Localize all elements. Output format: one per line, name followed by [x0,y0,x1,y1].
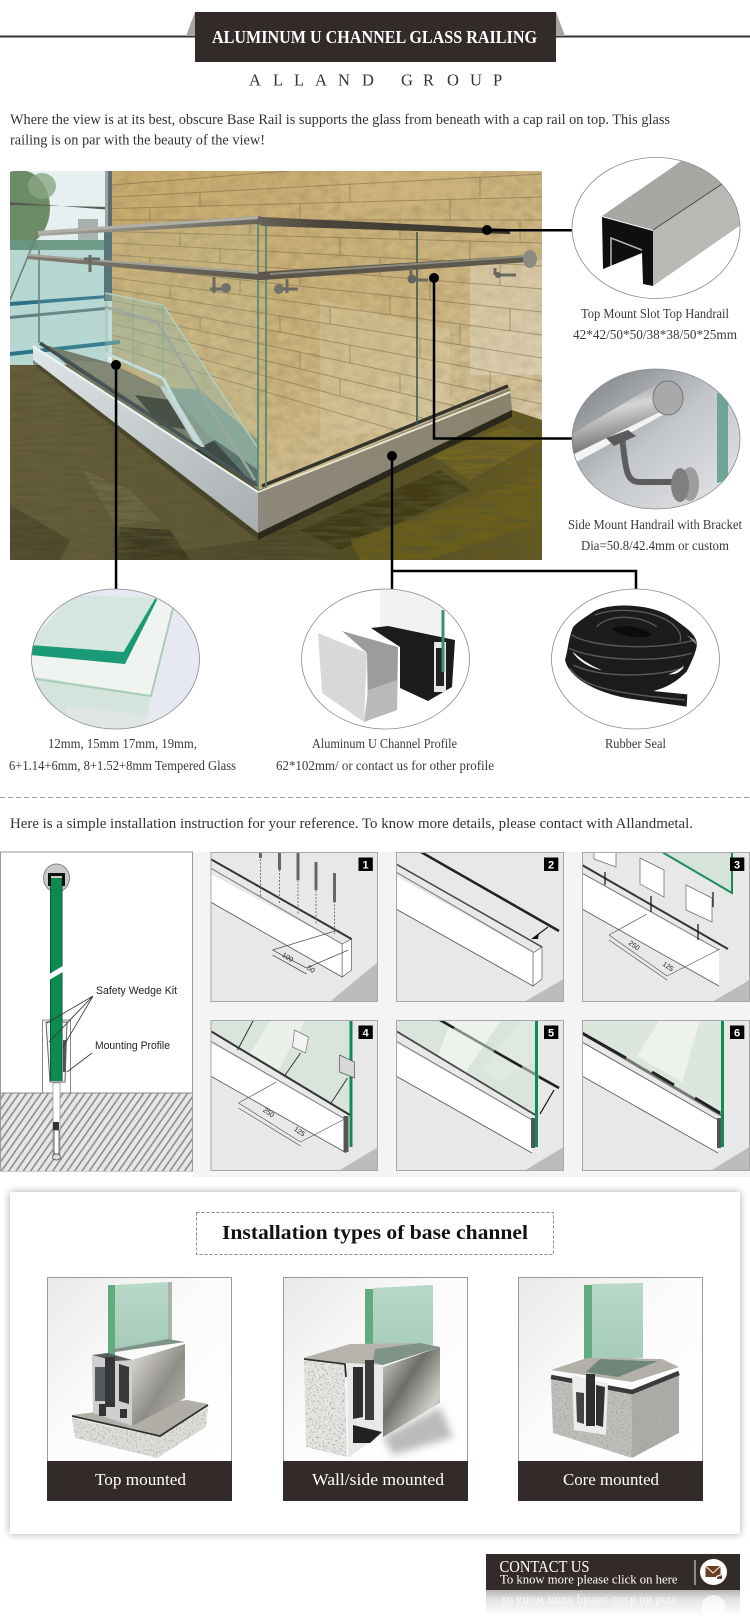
icon: envelope [700,1559,727,1585]
glass panels and posts [10,217,417,490]
caption: aluminum profile: Aluminum U Channel Profile [312,737,457,752]
step 1: 100 [280,952,294,964]
caption: tempered glass [9,737,236,774]
caption: rubber seal: Rubber Seal [605,737,666,752]
caption: tempered glass: 6+1.14+6mm, 8+1.52+8mm Tempered Glass [9,759,236,774]
intro paragraph: railing is on par with the beauty of the view! [10,132,265,148]
header banner [0,12,750,62]
step 3: 3 [734,860,740,872]
caption: tempered glass: 12mm, 15mm 17mm, 19mm, [48,737,197,752]
connector: top rail to handrail detail [482,225,572,235]
step 3: 125 [661,961,675,973]
caption: slot top handrail: 42*42/50*50/38*38/50*25mm [573,328,737,343]
step 3 [582,852,750,1002]
caption: side handrail bracket [568,518,742,554]
caption: side handrail bracket: Dia=50.8/42.4mm or custom [581,539,729,554]
detail: slot top handrail [572,157,745,298]
installation instruction sentence: Here is a simple installation instruction for your reference. To know more details, please contact with Allandmetal. [10,816,693,832]
step 5: 5 [548,1028,554,1040]
section divider [0,796,750,798]
label: safety wedge kit: Safety Wedge Kit [96,985,177,997]
label: core mounted [518,1461,703,1501]
label: top mounted [47,1461,232,1501]
step 1 [210,852,378,1002]
stair glass panel [105,293,258,490]
detail: tempered glass [28,589,200,735]
label: core mounted: Core mounted [563,1470,659,1489]
tile: top mounted [48,1278,232,1462]
step 4 [210,1020,378,1171]
contact us banner: CONTACT US [500,1557,590,1576]
photo: glass railing around stairwell [0,151,542,560]
top cap rail [38,216,510,236]
intro paragraph [10,112,670,148]
header banner: ALUMINUM U CHANNEL GLASS RAILING [212,27,537,47]
tile: core mounted [518,1278,702,1462]
caption: aluminum profile [276,737,494,774]
side handrail [27,250,537,294]
step 4: 4 [362,1028,369,1040]
connector: glass to tempered glass detail [111,360,121,589]
step 4: 250 [261,1107,275,1119]
step 2: 2 [548,860,554,872]
detail: rubber seal [552,589,720,729]
step 1: 50 [305,965,316,975]
intro paragraph: Where the view is at its best, obscure Base Rail is supports the glass from beneath with a cap rail on top. This glass [10,112,670,128]
window view [0,170,120,365]
step 1: 1 [362,860,369,872]
connector: side handrail to bracket detail [429,273,572,438]
tile: wall or side mounted [284,1278,468,1462]
handrail cap [44,864,70,892]
connector: channel to profile and seal details [387,451,636,589]
caption: slot top handrail: Top Mount Slot Top Handrail [581,307,729,322]
step 6: 6 [734,1028,740,1040]
banner reflection [486,1590,740,1619]
mounting profile [42,1020,70,1160]
caption: slot top handrail [573,307,737,343]
step 6 [582,1020,750,1171]
detail: side handrail bracket [570,369,740,509]
green glass pane [46,873,66,1081]
subtitle: Alland Group: ALLAND GROUP [249,70,502,90]
heading: installation types: Installation types of base channel [222,1222,528,1244]
cross-section diagram [0,852,192,1171]
banner reflection: To know more please click on here [500,1593,677,1608]
step 4: 125 [292,1126,306,1138]
stairwell [45,345,258,486]
stone wall [112,151,542,490]
carpet floor [10,355,542,560]
leader lines [47,996,93,1072]
step 3: 250 [627,940,641,952]
steps background [193,852,750,1177]
contact us banner [486,1554,740,1619]
label: wall or side mounted: Wall/side mounted [312,1470,445,1489]
contact us banner: To know more please click on here [500,1572,678,1586]
label: mounting profile: Mounting Profile [95,1040,170,1052]
step 5 [396,1020,564,1171]
label: wall or side mounted [283,1461,468,1501]
detail: aluminum U channel profile [302,589,470,729]
heading: installation types [196,1212,554,1254]
step 2 [396,852,564,1002]
panel: installation types card [10,1192,740,1534]
label: top mounted: Top mounted [95,1470,186,1489]
base channel [33,343,512,540]
caption: aluminum profile: 62*102mm/ or contact us for other profile [276,759,494,774]
